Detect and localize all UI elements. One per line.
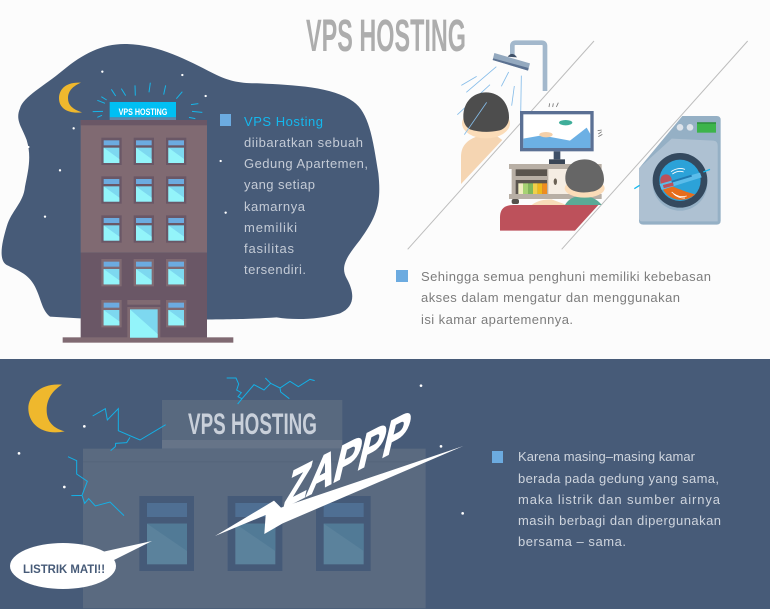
- text block: freedom of access: [421, 269, 711, 327]
- panel: power outage scene: [0, 359, 770, 609]
- building silhouette: [83, 400, 426, 608]
- icon: crescent moon: [59, 83, 82, 113]
- sofa: [500, 205, 598, 231]
- stars: [27, 70, 227, 218]
- text block: shared utilities: berada pada gedung yang sama,: [518, 471, 719, 486]
- shower person: [461, 136, 502, 184]
- icon: crescent moon: [28, 384, 65, 432]
- text block: VPS Hosting description: memiliki: [244, 220, 297, 235]
- bullet: [492, 451, 503, 463]
- text block: freedom of access: Sehingga semua penghuni memiliki kebebasan: [421, 269, 711, 284]
- sign rays: [93, 83, 202, 119]
- title: VPS HOSTING: [306, 10, 466, 61]
- viewer: [532, 159, 605, 205]
- diagonal dividers: [408, 41, 748, 249]
- text block: VPS Hosting description: kamarnya: [244, 199, 306, 214]
- electric cracks: [68, 378, 315, 516]
- lightning bolt: [215, 446, 463, 536]
- text block: shared utilities: maka listrik dan sumber airnya: [518, 492, 721, 507]
- text block: VPS Hosting description: yang setiap: [244, 177, 315, 192]
- page background: [0, 0, 770, 359]
- panel: room illustrations: [408, 41, 748, 249]
- text block: VPS Hosting description: tersendiri.: [244, 262, 306, 277]
- text block: shared utilities: bersama – sama.: [518, 534, 626, 549]
- text block: VPS Hosting description: VPS Hosting: [244, 114, 323, 129]
- text block: shared utilities: masih berbagi dan dipergunakan: [518, 513, 721, 528]
- building: [63, 102, 233, 343]
- text block: freedom of access: akses dalam mengatur dan menggunakan: [421, 290, 680, 305]
- ZAPPP lettering: ZAPPP: [280, 399, 416, 520]
- speech bubble: LISTRIK MATI!!: [23, 562, 105, 576]
- windows: [101, 138, 186, 327]
- text block: freedom of access: isi kamar apartemennya.: [421, 312, 573, 327]
- text block: shared utilities: Karena masing–masing kamar: [518, 449, 696, 464]
- sign text: VPS HOSTING: [188, 408, 317, 441]
- icon: shower: [457, 43, 545, 184]
- text block: VPS Hosting description: Gedung Apartemen,: [244, 156, 368, 171]
- bullet: [396, 270, 408, 282]
- rooftop sign: VPS HOSTING: [119, 107, 167, 117]
- door: [127, 300, 160, 338]
- tv cabinet: [509, 164, 602, 204]
- text block: VPS Hosting description: [244, 114, 368, 277]
- panel: night apartment scene: [2, 44, 379, 343]
- stars: [18, 384, 464, 515]
- bullet: [220, 114, 231, 126]
- rooftop sign: [110, 102, 176, 120]
- speech bubble: [10, 541, 152, 589]
- text block: shared utilities: [518, 449, 721, 549]
- text block: VPS Hosting description: fasilitas: [244, 241, 294, 256]
- icon: washing machine: [634, 116, 721, 225]
- night sky blob: [2, 44, 379, 319]
- text block: VPS Hosting description: diibaratkan sebuah: [244, 135, 363, 150]
- icon: television scene: [500, 103, 605, 231]
